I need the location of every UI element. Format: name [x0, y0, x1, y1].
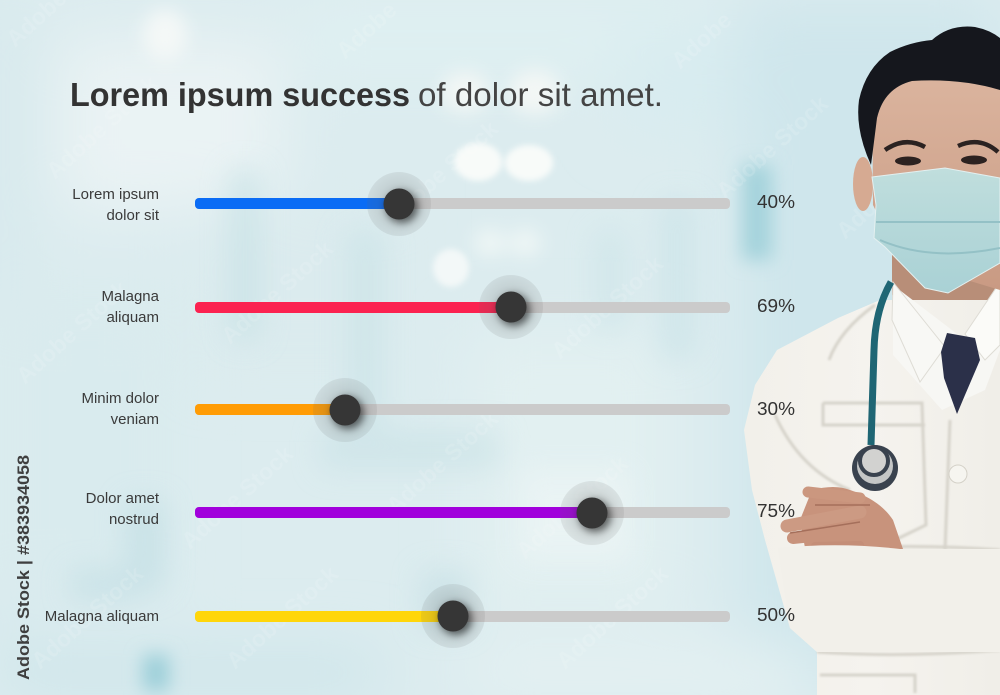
coat button	[949, 465, 967, 483]
stethoscope	[852, 282, 898, 491]
track	[195, 302, 730, 313]
knob	[367, 172, 431, 236]
stock watermarks: Adobe Stock	[176, 440, 298, 554]
label: aliquam	[106, 309, 159, 326]
title: Lorem ipsum success	[70, 76, 410, 113]
surgical mask	[872, 168, 1000, 293]
value: 40%	[757, 192, 795, 212]
stock id vertical text: Adobe Stock | #383934058	[14, 455, 33, 680]
necktie	[941, 333, 980, 414]
stock watermarks: Adobe Stock	[551, 560, 673, 674]
stock watermarks: Adobe Stock	[711, 90, 833, 204]
stock watermarks: Adobe Stock	[26, 560, 148, 674]
face	[872, 60, 1000, 290]
slider row 2: 69%	[101, 275, 795, 339]
hand	[787, 487, 903, 549]
slider row 4: 75%	[86, 481, 795, 545]
fill	[195, 198, 400, 209]
stock watermarks: Adobe Stock	[41, 70, 163, 184]
stock watermarks: Adobe Stock	[221, 560, 343, 674]
fill	[195, 507, 592, 518]
label: Dolor amet	[86, 490, 160, 507]
stock watermarks: Adobe Stock	[11, 275, 133, 389]
label: veniam	[111, 411, 159, 428]
knob	[313, 378, 377, 442]
value: 50%	[757, 605, 795, 625]
knob	[560, 481, 624, 545]
slider row 1: 40%	[72, 172, 795, 236]
slider row 5: 50%	[45, 584, 795, 648]
track	[195, 198, 730, 209]
title: of dolor sit amet.	[418, 76, 663, 113]
value: 69%	[757, 296, 795, 316]
hair	[858, 27, 1000, 165]
crossed sleeve	[778, 545, 1000, 652]
fill	[195, 611, 453, 622]
eyebrows and eyes	[885, 142, 998, 166]
stock watermarks: Adobe Stock	[381, 115, 503, 229]
knob	[421, 584, 485, 648]
label: Malagna aliquam	[45, 608, 159, 625]
neck	[892, 245, 1000, 345]
label: Malagna	[101, 288, 160, 305]
label: Minim dolor	[81, 390, 159, 407]
fill	[195, 404, 345, 415]
track	[195, 611, 730, 622]
stock watermarks: Adobe Stock	[216, 235, 338, 349]
value: 30%	[757, 399, 795, 419]
shirt and collar	[893, 280, 1000, 410]
fill	[195, 302, 512, 313]
lab coat	[744, 300, 1000, 695]
label: Lorem ipsum	[72, 186, 159, 203]
label: dolor sit	[106, 207, 160, 224]
value: 75%	[757, 501, 795, 521]
knob	[479, 275, 543, 339]
doctor illustration	[744, 27, 1000, 695]
ear	[853, 157, 873, 211]
track	[195, 507, 730, 518]
stock watermarks: Adobe Stock	[381, 405, 503, 519]
track	[195, 404, 730, 415]
coat shading	[775, 305, 1000, 693]
stock watermarks: Adobe Stock	[511, 450, 633, 564]
slider row 3: 30%	[81, 378, 795, 442]
stock watermarks: Adobe	[831, 177, 902, 244]
label: nostrud	[109, 511, 159, 528]
stock watermarks: Adobe	[666, 7, 737, 74]
stock watermarks: Adobe Stock	[546, 250, 668, 364]
